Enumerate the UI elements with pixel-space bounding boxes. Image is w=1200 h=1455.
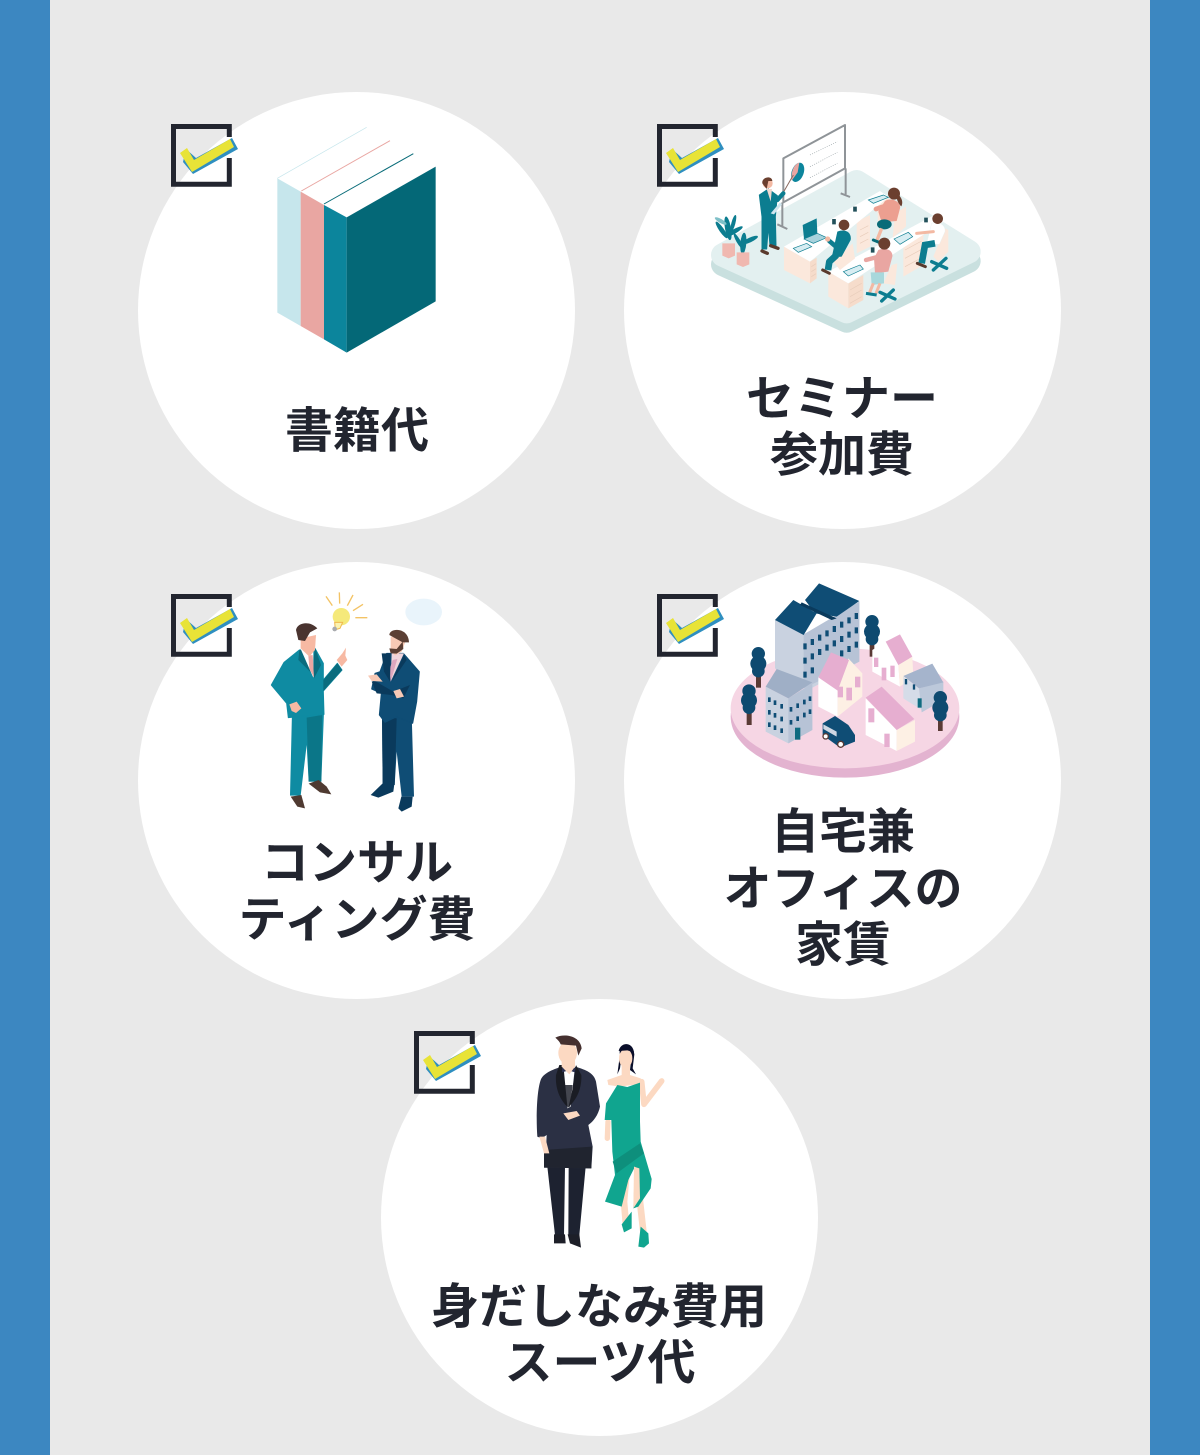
desks: [784, 191, 949, 308]
panel: attire: [381, 999, 818, 1436]
panel circle: [624, 92, 1061, 529]
light bulb: [326, 592, 367, 631]
car: [823, 716, 855, 748]
illustration: town: [731, 583, 959, 778]
small grey building: [766, 669, 812, 743]
man in navy suit: [368, 630, 419, 812]
panel circle: [381, 999, 818, 1436]
panel circle: [138, 92, 575, 529]
label: attire line 2: スーツ代: [504, 1337, 696, 1390]
panel: books: [138, 92, 575, 529]
attendee 2: [873, 188, 906, 243]
checkbox icon: [174, 126, 238, 184]
panel: home office rent: [624, 562, 1061, 999]
icon: books: [277, 127, 436, 353]
label: attire line 1: 身だしなみ費用: [431, 1281, 767, 1334]
right blue band: [1150, 0, 1200, 1455]
woman in green dress: [605, 1044, 662, 1248]
plants: [714, 214, 759, 267]
man in teal suit: [271, 623, 347, 808]
attendee 4: [917, 213, 948, 270]
label: rent: 家賃: [795, 919, 891, 972]
label: seminar: セミナー: [746, 373, 938, 426]
checkbox icon: [416, 1034, 481, 1091]
checkbox icon: [174, 596, 238, 654]
label: home office line 1: 自宅兼: [771, 806, 915, 859]
panel: consulting: [138, 562, 575, 999]
panel circle: [624, 562, 1061, 999]
pink base: [731, 648, 959, 778]
pink house far right: [872, 634, 913, 687]
illustration: seminar room: [714, 125, 969, 321]
label: consulting fee: ティング費: [238, 894, 476, 947]
panel: seminar: [624, 92, 1061, 529]
label: seminar fee: 参加費: [770, 429, 914, 482]
white house front: [866, 687, 915, 751]
panel circle: [138, 562, 575, 999]
left blue band: [0, 0, 50, 1455]
pink gabled house: [818, 652, 862, 717]
checkbox icon: [660, 596, 724, 654]
presenter: [759, 177, 783, 253]
label: home office line 2: オフィスの: [723, 863, 963, 916]
checkbox icon: [660, 126, 724, 184]
label: books: 書籍代: [285, 405, 429, 458]
label: consulting: コンサル: [261, 837, 453, 890]
illustration: consultants: [271, 592, 442, 812]
attendee 3: [866, 238, 897, 301]
man in tuxedo: [537, 1036, 600, 1248]
tall building: [775, 583, 859, 690]
tree front right: [932, 691, 948, 731]
illustration: couple: [537, 1036, 662, 1248]
blue house: [903, 664, 943, 712]
speech bubble: [405, 599, 442, 625]
attendee 1: [823, 220, 855, 273]
trees: [741, 615, 880, 725]
